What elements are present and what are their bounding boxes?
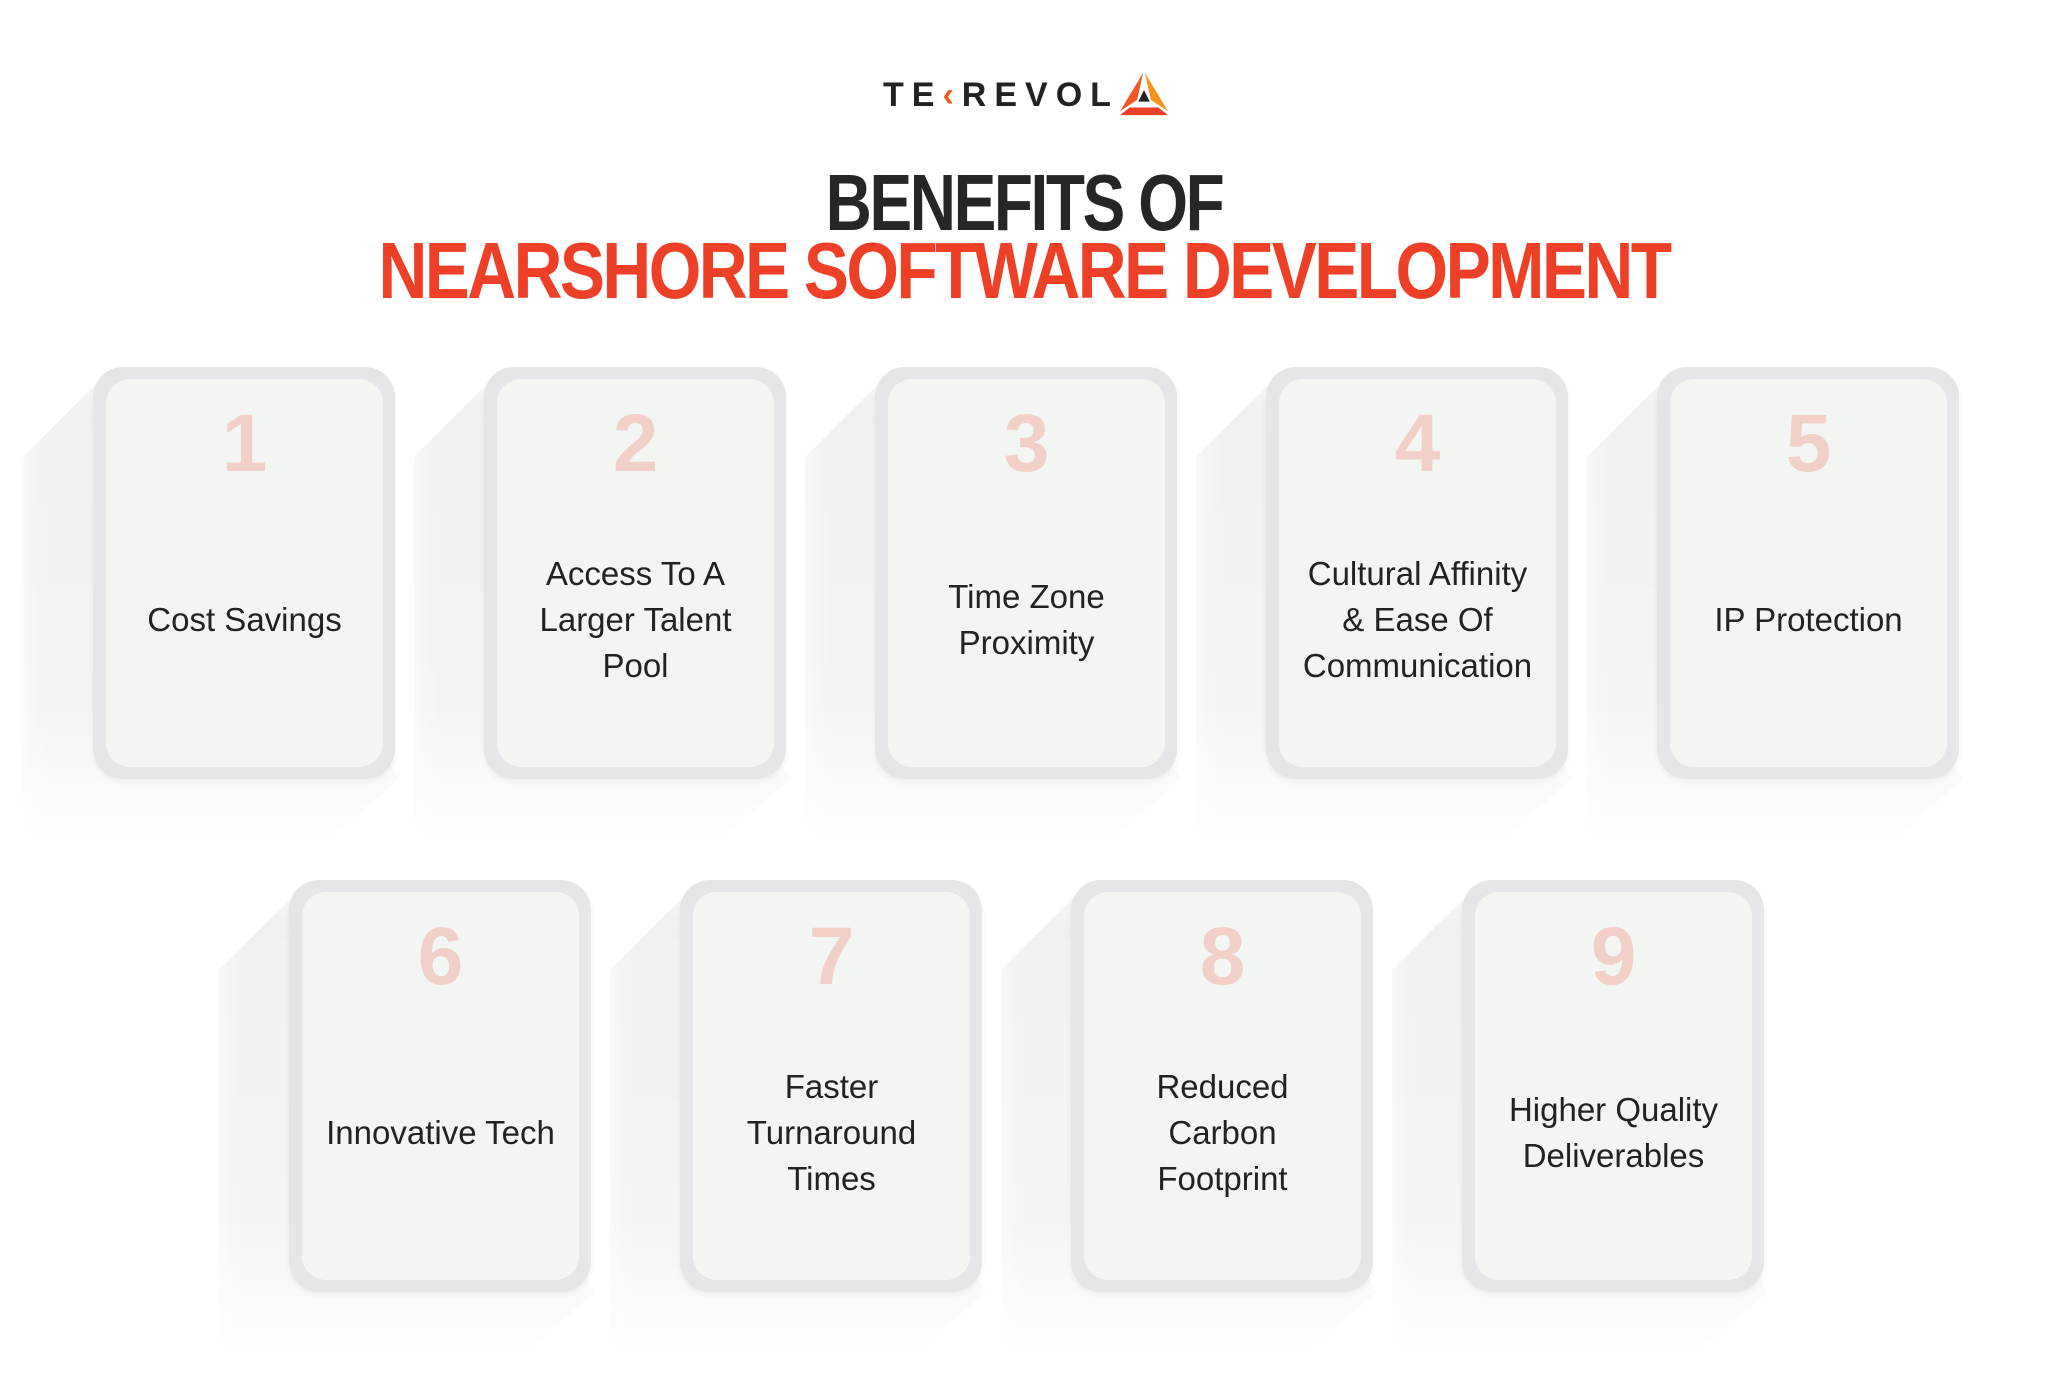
card 4: Communication (1303, 647, 1532, 684)
card 8: Reduced (1156, 1068, 1289, 1105)
icon: logo triangle (1120, 73, 1168, 116)
card 4: & Ease Of (1342, 601, 1493, 638)
card 6: Innovative Tech (326, 1114, 555, 1151)
card 7: Turnaround (747, 1114, 916, 1151)
card 2 (418, 367, 786, 784)
card 4: Cultural Affinity (1308, 555, 1527, 592)
card 7 (614, 880, 982, 1296)
card 1: 1 (222, 398, 267, 489)
card 9 (1396, 880, 1764, 1296)
card 2: 2 (613, 398, 658, 489)
title line 2: NEARSHORE SOFTWARE DEVELOPMENT (378, 226, 1670, 315)
logo wordmark: TE‹REVOL (883, 76, 1119, 114)
card 2: Access To A (546, 555, 725, 592)
card 9: Deliverables (1523, 1137, 1704, 1174)
card 8: Carbon (1168, 1114, 1277, 1151)
card 7: 7 (809, 911, 854, 1002)
card 3 (809, 367, 1177, 784)
card 9: Higher Quality (1509, 1091, 1718, 1128)
card 2: Pool (602, 647, 669, 684)
card 3: Time Zone (948, 578, 1105, 615)
card 5: 5 (1786, 398, 1831, 489)
card 3: 3 (1004, 398, 1049, 489)
card 8: Footprint (1157, 1160, 1288, 1197)
title line 1: BENEFITS OF (826, 158, 1222, 247)
card 5: IP Protection (1714, 601, 1903, 638)
card 4 (1200, 367, 1568, 784)
card 1 (27, 367, 395, 784)
card 2: Larger Talent (539, 601, 732, 638)
logo (883, 73, 1168, 116)
card 8: 8 (1200, 911, 1245, 1002)
card 7: Faster (785, 1068, 878, 1105)
card 3: Proximity (959, 624, 1094, 661)
card 6 (223, 880, 591, 1296)
card 8 (1005, 880, 1373, 1296)
title (378, 158, 1672, 315)
card 4: 4 (1395, 398, 1440, 489)
card 6: 6 (418, 911, 463, 1002)
card 5 (1591, 367, 1959, 784)
card 7: Times (787, 1160, 876, 1197)
card 9: 9 (1591, 911, 1636, 1002)
card 1: Cost Savings (147, 601, 342, 638)
